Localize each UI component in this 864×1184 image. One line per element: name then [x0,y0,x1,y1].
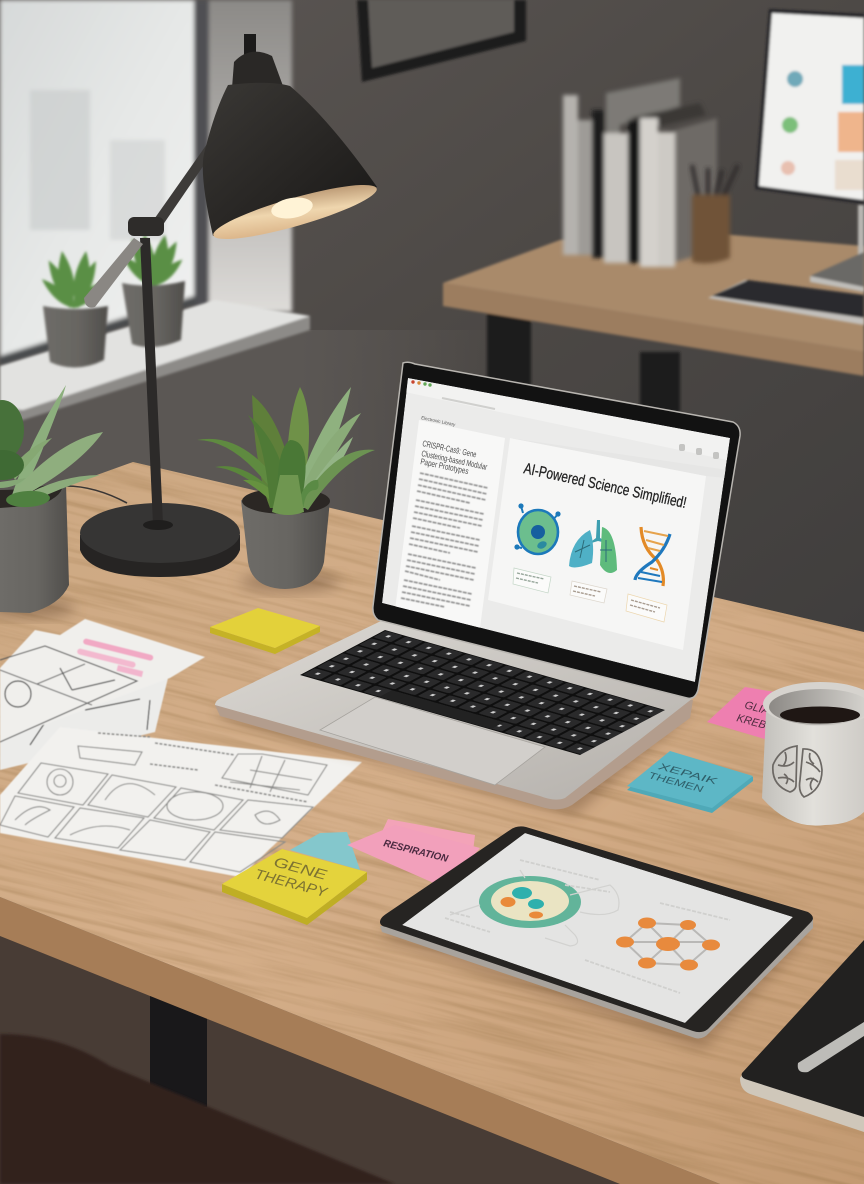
pencil cup [692,165,738,263]
floor [0,920,640,1184]
trackpad [320,697,545,785]
office chair [0,1034,395,1184]
icon: brain [773,746,822,797]
lamp cable [66,486,127,503]
blue sticky note: XEPAIK [655,761,719,788]
icon: cell [514,503,561,554]
books on back desk [563,78,717,267]
back keyboard and monitor stand [708,205,864,325]
window plant right [119,234,186,347]
tablet [380,826,813,1050]
yellow gene therapy sticky note: THERAPY [253,865,331,901]
tablet network diagram [616,918,720,970]
yellow gene therapy sticky note [222,849,367,925]
pen [798,1022,864,1072]
tablet cell diagram [479,876,581,928]
window with blurred city view [0,0,292,366]
blue sticky note behind [290,832,360,870]
desk front face [0,897,720,1184]
pink sticky note [347,819,480,888]
yellow sticky note [210,608,320,654]
yellow gene therapy sticky note: GENE [272,853,329,883]
article panel: Electronic Library [421,415,457,427]
caption box orange [570,581,607,603]
laptop lid and bezel [373,362,740,698]
keyboard [300,630,665,755]
pink sticky note behind mug: KREB [735,712,767,732]
caption box green [513,568,551,593]
article panel [395,415,505,628]
blue sticky note: THEMEN [647,770,704,795]
coffee mug with brain logo [762,682,864,826]
background wall [0,0,864,640]
desk leg [150,985,207,1107]
icon: DNA helix [635,527,670,586]
laptop base [215,620,693,809]
pink sticky note behind mug: GLIA [743,699,771,717]
lower wall below the windowsill [0,330,500,540]
icon: lungs [569,520,617,573]
back monitor [755,9,864,204]
slide panel [488,438,728,650]
sketch paper front with storyboard [0,727,362,877]
sketch paper top with pink notes [0,619,205,742]
back desk with legs [443,234,864,412]
large potted plant at left [0,385,103,618]
laptop screen [382,378,730,682]
potted plant on desk [197,387,375,592]
tablet diagram annotations [450,870,619,946]
tablet screen [402,833,793,1023]
sketch paper middle [0,678,168,770]
article panel: CRISPR-Cas9: Gene [422,438,478,459]
window plant left [38,250,108,368]
windowsill [0,300,310,425]
desk lamp [80,34,381,577]
picture frame on the wall [357,0,526,82]
main desk top [0,462,864,1184]
slide title: AI-Powered Science Simplified! [522,460,688,512]
article panel: Paper Prototypes [420,456,470,476]
laptop [215,362,740,815]
article panel: Clustering-based Modular [421,448,488,472]
blue sticky note [627,751,753,813]
caption box yellow [626,594,667,622]
sketch paper stack [0,619,362,877]
notebook and pen [740,940,864,1132]
pink sticky note: RESPIRATION [382,838,450,865]
wood grain [0,462,864,1184]
pink sticky note behind mug [707,687,775,740]
browser toolbar [405,378,730,460]
